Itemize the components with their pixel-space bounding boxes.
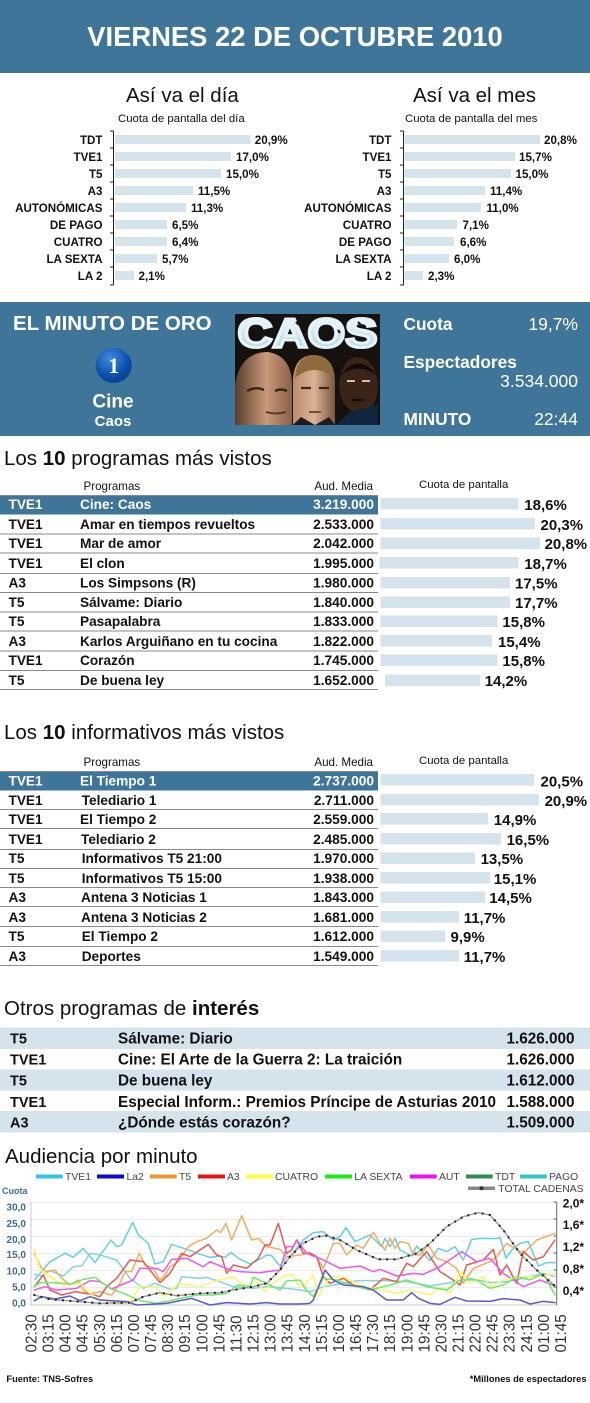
- share bars: [380, 498, 540, 686]
- row 8: 1.822.000: [313, 634, 374, 649]
- row 10: De buena ley: [80, 673, 165, 688]
- row 2: [8, 793, 587, 810]
- heading: los 10 informativos más vistos: Los 10 informativos más vistos: [4, 721, 284, 744]
- row 8: A3: [8, 634, 26, 649]
- row 4: [8, 556, 567, 573]
- row 4: 1.588.000: [506, 1094, 574, 1111]
- series: AUT: [34, 1240, 555, 1290]
- left axis labels: [7, 1202, 26, 1310]
- axis: month chart: [400, 131, 404, 285]
- bar chart: month shares: 11,0%: [486, 202, 519, 215]
- row 3: De buena ley: [118, 1072, 213, 1090]
- series: total cadenas line: [34, 1213, 555, 1303]
- row stripes: [0, 1028, 590, 1132]
- right axis labels: 0,8*: [563, 1262, 584, 1276]
- bar chart: day shares: 11,3%: [191, 202, 223, 215]
- row 2: Telediario 1: [82, 793, 157, 808]
- legend: PAGO: [549, 1172, 578, 1183]
- programme label: Cine: Cine: [92, 392, 134, 412]
- row 3: 2.559.000: [313, 812, 374, 827]
- legend: [36, 1172, 584, 1195]
- row 6: T5: [8, 595, 25, 610]
- bar chart: month shares: CUATRO: [343, 219, 392, 232]
- row 10: A3: [8, 949, 26, 964]
- time axis labels: 06:15: [109, 1314, 126, 1352]
- row 2: TVE1: [8, 517, 43, 532]
- row 9: El Tiempo 2: [82, 929, 158, 944]
- left axis labels: 25,0: [7, 1219, 26, 1230]
- time axis labels: 01:00: [536, 1314, 553, 1352]
- row 6: Informativos T5 15:00: [82, 871, 222, 886]
- row 4: 2.485.000: [313, 832, 374, 847]
- row 3: 2.042.000: [313, 536, 374, 551]
- axis: day chart: [110, 131, 114, 285]
- row 1: Sálvame: Diario: [118, 1030, 233, 1048]
- time axis labels: 10:00: [194, 1314, 211, 1352]
- left axis labels: 5,0: [12, 1282, 26, 1294]
- row 9: T5: [8, 929, 25, 944]
- row 3: 1.612.000: [506, 1072, 574, 1090]
- time axis labels: 07:00: [126, 1314, 143, 1352]
- row 9: 1.612.000: [313, 929, 374, 944]
- row 3: T5: [10, 1074, 27, 1090]
- row 1: Cine Caos: TVE1: [8, 497, 43, 512]
- row 1: El Tiempo 1: [8, 774, 583, 790]
- row 6: 17,7%: [515, 595, 558, 612]
- stat: espectadores: [404, 352, 578, 391]
- programme label: Caos: Caos: [95, 413, 131, 430]
- row 1: Cine Caos: 3.219.000: [313, 497, 374, 512]
- row 3: [8, 536, 587, 553]
- legend: A3: [227, 1172, 240, 1183]
- stat: cuota: Cuota: [404, 314, 453, 334]
- stat: minuto: 22:44: [534, 409, 578, 429]
- row 7: 15,8%: [502, 614, 545, 631]
- left axis labels: 15,0: [7, 1250, 26, 1261]
- series: TVE1: [35, 1222, 555, 1279]
- legend: AUT: [439, 1172, 460, 1183]
- time axis labels: 22:45: [485, 1314, 502, 1352]
- bar chart: day shares: 6,4%: [172, 236, 198, 249]
- bar chart: month shares: 11,4%: [490, 185, 522, 198]
- table: los 10 programas más vistos: [0, 479, 587, 690]
- row 10: Deportes: [82, 949, 141, 964]
- time axis labels: 23:30: [502, 1314, 519, 1352]
- row 8: 1.681.000: [313, 910, 374, 925]
- bar chart: month shares: LA 2: [367, 270, 392, 283]
- time axis labels: 24:15: [519, 1314, 536, 1352]
- stat: minuto: [404, 409, 578, 429]
- row 1: El Tiempo 1: 2.737.000: [313, 774, 374, 788]
- row 2: 2.533.000: [313, 517, 374, 532]
- row 8: [8, 634, 541, 651]
- bar chart: month shares: 7,1%: [462, 219, 489, 232]
- row 1: Cine Caos: [8, 497, 567, 514]
- bar chart: day shares: TVE1: [74, 151, 103, 164]
- legend: TOTAL CADENAS: [498, 1184, 584, 1195]
- bar chart: month shares: 2,3%: [428, 270, 454, 283]
- bar chart: day shares: AUTONÓMICAS: [15, 202, 103, 215]
- row 6: [8, 871, 536, 888]
- row 4: Especial Inform.: Premios Príncipe de Asturias 2010: [118, 1094, 496, 1111]
- panel: el minuto de oro: [0, 302, 590, 436]
- time axis labels: 03:15: [41, 1314, 58, 1352]
- series: PAGO: [34, 1253, 555, 1292]
- column headers: Cuota de pantalla: [419, 755, 509, 767]
- panel: así va el día: [15, 84, 288, 285]
- row 2: 20,3%: [540, 517, 583, 534]
- row 4: TVE1: [10, 1095, 46, 1111]
- table: los 10 informativos más vistos: [0, 755, 587, 966]
- row 5: [10, 1114, 574, 1132]
- left axis labels: 20,0: [7, 1235, 26, 1246]
- bar chart: day shares: T5: [89, 168, 103, 181]
- bar chart: month shares: DE PAGO: [339, 236, 392, 249]
- bar chart: month shares: [304, 134, 577, 283]
- time axis labels: 22:00: [468, 1314, 485, 1352]
- time axis labels: 19:00: [399, 1314, 416, 1352]
- right axis labels: 2,0*: [563, 1196, 584, 1210]
- time axis labels: 17:30: [365, 1314, 382, 1352]
- row 1: El Tiempo 1: El Tiempo 1: [80, 774, 157, 788]
- row 7: A3: [8, 890, 26, 905]
- bar chart: day shares: CUATRO: [54, 236, 102, 249]
- highlighted row background: [0, 772, 378, 790]
- row 4: El clon: [80, 556, 125, 571]
- series: T5: [34, 1216, 555, 1295]
- row 3: TVE1: [8, 536, 43, 551]
- row 5: ¿Dónde estás corazón?: [118, 1114, 291, 1132]
- row 5: A3: [8, 576, 26, 590]
- bar chart: month shares: 20,8%: [544, 134, 577, 147]
- row 10: [8, 949, 505, 966]
- panel: así va el mes: [304, 84, 577, 285]
- row 4: 1.995.000: [313, 556, 374, 571]
- bar chart: day shares: 5,7%: [162, 253, 188, 266]
- bar chart: month shares: 6,6%: [460, 236, 486, 249]
- stat: cuota: 19,7%: [528, 314, 578, 334]
- row 8: [8, 910, 505, 927]
- row 4: 18,7%: [524, 556, 567, 573]
- heading: los 10 programas más vistos: Los 10 programas más vistos: [4, 447, 272, 470]
- time axis labels: 21:15: [450, 1314, 468, 1352]
- legend: La2: [126, 1172, 144, 1183]
- heading: el minuto de oro: EL MINUTO DE ORO: [13, 312, 212, 335]
- row 7: 1.833.000: [313, 614, 374, 629]
- stat: minuto: MINUTO: [404, 409, 471, 429]
- row 5: T5: [8, 851, 25, 866]
- row 2: Amar en tiempos revueltos: [80, 517, 256, 532]
- time axis labels: [24, 1314, 570, 1352]
- line chart: audience by minute: [31, 1202, 557, 1305]
- row 2: [8, 517, 583, 534]
- row 1: Cine Caos: Cine: Caos: [80, 497, 152, 512]
- time axis labels: 01:45: [553, 1314, 570, 1352]
- footer notes: [6, 1374, 586, 1384]
- row 4: 16,5%: [507, 832, 549, 849]
- row 9: TVE1: [8, 653, 43, 668]
- row 5: [8, 851, 523, 868]
- bar chart: day shares: 20,9%: [255, 134, 288, 147]
- row 9: 9,9%: [450, 929, 485, 946]
- time axis labels: 04:00: [58, 1314, 75, 1352]
- row 2: Cine: El Arte de la Guerra 2: La traición: [118, 1052, 402, 1068]
- time axis labels: 04:45: [75, 1314, 92, 1352]
- row 3: 20,8%: [545, 536, 587, 553]
- stat: espectadores: 3.534.000: [500, 371, 578, 391]
- row 3: 14,9%: [494, 812, 536, 829]
- legend: T5: [179, 1172, 191, 1183]
- row 3: [8, 812, 536, 829]
- row 10: 11,7%: [464, 949, 505, 966]
- time axis labels: 13:00: [263, 1314, 280, 1352]
- bar chart: day shares: TDT: [80, 134, 102, 147]
- series: A3: [34, 1223, 555, 1297]
- source: Fuente: TNS-Sofres: [6, 1374, 93, 1384]
- time axis labels: 10:45: [211, 1314, 228, 1352]
- row 9: [8, 653, 545, 670]
- row 5: 13,5%: [481, 851, 523, 868]
- row 6: [8, 595, 558, 612]
- row 7: T5: [8, 614, 25, 629]
- row 1: [10, 1030, 574, 1048]
- row 1: El Tiempo 1: 20,5%: [540, 774, 583, 790]
- heading: así va el mes: Así va el mes: [413, 84, 536, 107]
- row 7: Antena 3 Noticias 1: [81, 890, 207, 905]
- row 5: 1.970.000: [313, 851, 374, 866]
- row 7: Pasapalabra: [80, 614, 161, 629]
- time axis labels: 16:45: [348, 1314, 365, 1352]
- subtitle: cuota del día: Cuota de pantalla del día: [118, 113, 245, 125]
- row 7: [8, 890, 532, 907]
- row 3: TVE1: [8, 812, 43, 827]
- time axis labels: 12:15: [246, 1314, 262, 1352]
- series: CUATRO: [34, 1250, 555, 1303]
- row 8: A3: [8, 910, 26, 925]
- row 7: [8, 614, 545, 631]
- row 6: 1.938.000: [313, 871, 374, 886]
- row 8: 15,4%: [498, 634, 541, 651]
- row 10: [8, 673, 527, 690]
- column headers: Cuota de pantalla: [419, 479, 509, 491]
- time axis labels: 18:15: [382, 1314, 399, 1352]
- bar chart: day shares: 15,0%: [226, 168, 259, 181]
- icon: TVE1 logo: [96, 348, 132, 383]
- header band with title: [0, 0, 590, 73]
- time axis labels: 14:30: [297, 1314, 314, 1352]
- bar chart: day shares: A3: [88, 185, 103, 198]
- row 10: T5: [8, 673, 25, 688]
- column headers: [84, 479, 509, 493]
- row 10: 1.549.000: [313, 949, 374, 964]
- time axis labels: 05:30: [92, 1314, 109, 1352]
- bar chart: month shares: TVE1: [362, 151, 392, 164]
- legend: CUATRO: [275, 1172, 318, 1183]
- heading: otros programas de interés: Otros programas de interés: [4, 997, 259, 1020]
- row 5: A3: [10, 1116, 29, 1132]
- row 9: 1.745.000: [313, 653, 374, 668]
- share bars: [380, 774, 539, 962]
- row 9: Corazón: [80, 653, 135, 668]
- row 6: T5: [8, 871, 25, 886]
- column headers: [84, 755, 509, 769]
- time axis labels: 13:45: [280, 1314, 297, 1352]
- bar chart: day shares: LA SEXTA: [46, 253, 103, 266]
- column headers: Programas: [84, 756, 140, 769]
- row 6: 1.840.000: [313, 595, 374, 610]
- right axis labels: 1,2*: [563, 1240, 584, 1254]
- column headers: Programas: [84, 480, 140, 493]
- bar chart: month shares: T5: [378, 168, 392, 181]
- row 8: 11,7%: [464, 910, 505, 927]
- series: LA SEXTA: [34, 1273, 555, 1303]
- bar chart: day shares: 11,5%: [198, 185, 230, 198]
- time axis labels: 19:45: [416, 1314, 433, 1352]
- row lines: [0, 772, 378, 966]
- time axis labels: 08:30: [160, 1314, 177, 1352]
- time axis labels: 16:00: [331, 1314, 348, 1352]
- column headers: Aud. Media: [314, 480, 374, 493]
- row 9: 15,8%: [502, 653, 545, 670]
- row 4: Telediario 2: [81, 832, 156, 847]
- row 2: 1.626.000: [506, 1052, 574, 1068]
- axis title: cuota: Cuota: [2, 1186, 28, 1196]
- time axis labels: 02:30: [24, 1314, 40, 1352]
- left axis labels: 0,0: [12, 1298, 26, 1310]
- row 7: 14,5%: [489, 890, 532, 907]
- left axis labels: 30,0: [7, 1202, 26, 1214]
- row 1: T5: [10, 1032, 27, 1048]
- row 6: 15,1%: [494, 871, 536, 888]
- bar chart: month shares: LA SEXTA: [335, 253, 392, 266]
- time axis labels: 09:15: [177, 1314, 194, 1352]
- image: Caos film poster: [235, 310, 380, 425]
- row 3: Mar de amor: [80, 536, 162, 551]
- row 5: [8, 576, 558, 592]
- row 5: 1.980.000: [313, 576, 374, 590]
- row 6: Sálvame: Diario: [80, 595, 182, 610]
- highlighted row background: [0, 496, 378, 514]
- right axis labels: [563, 1196, 584, 1298]
- row 3: El Tiempo 2: [80, 812, 157, 827]
- legend: LA SEXTA: [354, 1172, 403, 1183]
- row 5: 1.509.000: [506, 1114, 574, 1132]
- subtitle: cuota del mes: Cuota de pantalla del mes: [405, 113, 538, 125]
- bar chart: day shares: 6,5%: [172, 219, 198, 232]
- stat: cuota: [404, 314, 578, 334]
- row 9: [8, 929, 485, 946]
- bar chart: day shares: 17,0%: [236, 151, 269, 164]
- row 1: Cine Caos: 18,6%: [524, 497, 567, 514]
- legend: TDT: [495, 1172, 516, 1183]
- right axis labels: 0,4*: [563, 1284, 584, 1298]
- time axis labels: 20:30: [433, 1314, 450, 1352]
- row 2: TVE1: [8, 793, 43, 808]
- bar chart: day shares: LA 2: [78, 270, 102, 283]
- column headers: Aud. Media: [314, 756, 374, 769]
- row 1: El Tiempo 1: TVE1: [8, 774, 43, 788]
- row lines: [0, 496, 378, 690]
- bar chart: month shares: 15,7%: [519, 151, 552, 164]
- row 4: [8, 832, 549, 849]
- bar chart: day shares: 2,1%: [138, 270, 165, 283]
- left axis labels: 10,0: [7, 1266, 26, 1278]
- series: La2: [34, 1270, 555, 1305]
- row 3: [10, 1072, 574, 1090]
- bar chart: month shares: AUTONÓMICAS: [304, 202, 392, 215]
- row 1: 1.626.000: [506, 1030, 574, 1048]
- footnote: *Millones de espectadores: [470, 1374, 586, 1384]
- bar chart: month shares: TDT: [369, 134, 392, 147]
- time axis labels: 11:30: [228, 1315, 246, 1352]
- row 10: 14,2%: [485, 673, 527, 690]
- row 10: 1.652.000: [313, 673, 374, 688]
- bar chart: day shares: DE PAGO: [50, 219, 102, 232]
- row 5: Informativos T5 21:00: [82, 851, 222, 866]
- legend: TVE1: [65, 1172, 91, 1183]
- bar chart: month shares: A3: [377, 185, 392, 198]
- row 5: Los Simpsons (R): [80, 576, 196, 590]
- row 4: [10, 1094, 574, 1111]
- row 2: TVE1: [10, 1052, 46, 1068]
- image: Caos film poster: CAOS: [238, 310, 378, 356]
- row 4: TVE1: [8, 832, 43, 847]
- row 2: 20,9%: [545, 793, 587, 810]
- row 4: TVE1: [8, 556, 43, 571]
- row 5: 17,5%: [515, 576, 558, 592]
- row 7: 1.843.000: [313, 890, 374, 905]
- heading: audiencia por minuto: Audiencia por minuto: [5, 1145, 198, 1168]
- row 8: Karlos Arguiñano en tu cocina: [80, 634, 278, 649]
- title: VIERNES 22 DE OCTUBRE 2010: [87, 21, 503, 52]
- time axis labels: 15:15: [314, 1314, 331, 1352]
- icon: TVE1 logo: 1: [108, 353, 119, 378]
- bar chart: day shares: [15, 134, 288, 283]
- time axis labels: 07:45: [143, 1314, 160, 1352]
- bar chart: month shares: 15,0%: [516, 168, 548, 181]
- right axis labels: 1,6*: [563, 1218, 584, 1232]
- row 2: 2.711.000: [314, 793, 374, 808]
- stat: espectadores: Espectadores: [404, 352, 517, 372]
- row 8: Antena 3 Noticias 2: [81, 910, 207, 925]
- table: otros programas de interés: [0, 1028, 590, 1132]
- bar chart: month shares: 6,0%: [454, 253, 480, 266]
- series: total cadenas markers: [34, 1213, 555, 1303]
- heading: así va el día: Así va el día: [126, 84, 239, 107]
- row 2: [10, 1052, 574, 1068]
